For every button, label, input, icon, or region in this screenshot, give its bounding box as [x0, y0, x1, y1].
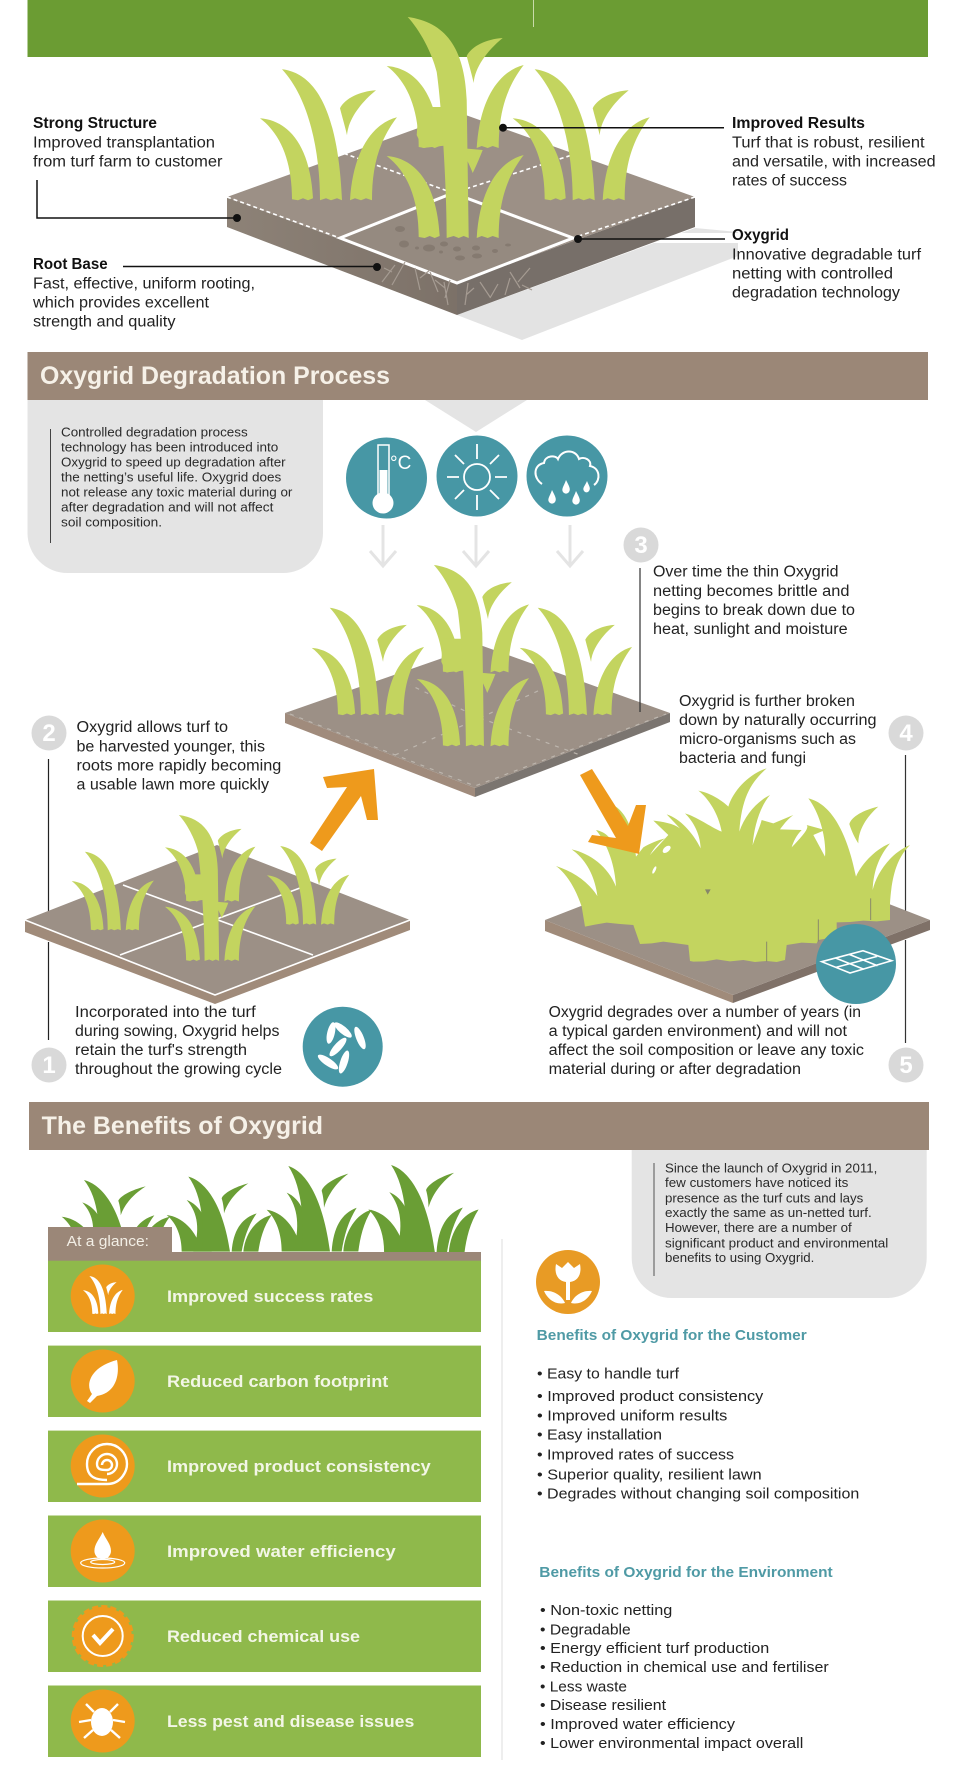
panel: launch of Oxygrid note: significant product and environmental [665, 1235, 888, 1250]
step 5: affect the soil composition or leave any toxic [549, 1042, 864, 1059]
list: benefits for the customer: • Improved product consistency [537, 1388, 764, 1405]
icon: temperature [346, 438, 427, 518]
illustration: Oxygrid turf cross-section [227, 17, 740, 340]
step 2: be harvested younger, this [76, 739, 265, 756]
row: less pest and disease issues: Less pest and disease issues [167, 1712, 414, 1731]
section heading: The Benefits of Oxygrid: The Benefits of Oxygrid [42, 1112, 323, 1140]
step 1: retain the turf's strength [75, 1042, 247, 1059]
list: benefits for the customer: • Improved uniform results [537, 1407, 727, 1424]
icon: seeds [303, 1007, 383, 1087]
step 4: down by naturally occurring [679, 712, 876, 729]
step 5: material during or after degradation [549, 1061, 801, 1078]
step 3 [624, 528, 855, 712]
callout: Strong Structure: Strong Structure [33, 115, 157, 132]
top green header band [28, 0, 928, 57]
illustration: stage 1 young turf with visible netting [25, 815, 410, 1004]
list: benefits for the customer: • Easy installation [537, 1427, 662, 1444]
panel: controlled degradation intro: soil composition. [61, 515, 162, 530]
panel: launch of Oxygrid note [632, 1150, 927, 1298]
list: benefits for the customer [537, 1327, 859, 1503]
icon: sunlight [436, 436, 518, 516]
step 4: Oxygrid is further broken [679, 693, 855, 710]
panel: launch of Oxygrid note: benefits to using Oxygrid. [665, 1250, 814, 1265]
step 3: heat, sunlight and moisture [653, 621, 848, 638]
step 2: roots more rapidly becoming [76, 758, 281, 775]
step 4: micro-organisms such as [679, 731, 856, 748]
list: benefits for the environment: • Degradable [540, 1622, 631, 1638]
step 4 [679, 693, 924, 1043]
callout: Oxygrid: degradation technology [732, 284, 900, 301]
callout: Oxygrid: Innovative degradable turf [732, 246, 922, 263]
callout: Root Base: which provides excellent [32, 295, 210, 312]
arrow: stage 2 to 3 [310, 769, 378, 851]
panel: launch of Oxygrid note: However, there are a number of [665, 1220, 852, 1235]
step 5: a typical garden environment) and will not [549, 1023, 848, 1040]
step 3: netting becomes brittle and [653, 583, 850, 600]
callout: Improved Results: rates of success [732, 173, 847, 190]
panel: launch of Oxygrid note: presence as the turf cuts and lays [665, 1190, 863, 1206]
panel: controlled degradation intro: technology has been introduced into [61, 440, 278, 455]
row: improved water efficiency [48, 1516, 481, 1587]
row: improved success rates [48, 1261, 481, 1332]
panel: launch of Oxygrid note: Since the launch of Oxygrid in 2011, [665, 1160, 877, 1175]
callout: Root Base [32, 256, 381, 330]
step 4: bacteria and fungi [679, 750, 806, 767]
step 1: 1 [42, 1052, 56, 1079]
step 1: Incorporated into the turf [75, 1004, 256, 1021]
callout: Oxygrid [574, 227, 922, 301]
panel: controlled degradation intro [28, 400, 323, 573]
step 5: 5 [899, 1052, 913, 1079]
callout: Strong Structure [33, 115, 241, 222]
panel: controlled degradation intro: not release any toxic material during or [61, 485, 293, 500]
callout: Improved Results: and versatile, with increased [732, 154, 936, 171]
panel: controlled degradation intro: Oxygrid to speed up degradation after [61, 455, 286, 470]
row: reduced chemical use [48, 1600, 481, 1672]
callout: Oxygrid: netting with controlled [732, 265, 893, 282]
panel: controlled degradation intro: after degradation and will not affect [61, 500, 274, 515]
section heading: Oxygrid Degradation Process: Oxygrid Degradation Process [40, 362, 390, 390]
row: improved product consistency: Improved product consistency [167, 1457, 431, 1476]
list: benefits for the environment: Benefits of Oxygrid for the Environment [539, 1564, 833, 1581]
callout: Improved Results: Improved Results [732, 115, 865, 132]
step 2: a usable lawn more quickly [76, 776, 269, 793]
icon: flower [536, 1250, 600, 1314]
list: benefits for the environment: • Non-toxic netting [540, 1602, 672, 1619]
step 1 [32, 1004, 282, 1082]
step 2: Oxygrid allows turf to [76, 719, 228, 736]
list: benefits for the environment: • Lower environmental impact overall [540, 1735, 803, 1752]
row: reduced carbon footprint: Reduced carbon footprint [167, 1372, 389, 1391]
illustration: dark green grass strip [62, 1165, 479, 1252]
step 1: during sowing, Oxygrid helps [75, 1023, 280, 1040]
illustration: stage 3 turf with brittle netting [285, 565, 670, 797]
panel: controlled degradation intro: Controlled degradation process [61, 425, 248, 440]
callout: Root Base: Root Base [33, 256, 108, 273]
step 5: Oxygrid degrades over a number of years (in [549, 1004, 861, 1021]
list: benefits for the environment: • Energy efficient turf production [540, 1640, 769, 1657]
step 2: 2 [42, 720, 56, 747]
at a glance tab: At a glance: [67, 1233, 149, 1250]
callout: Improved Results [499, 115, 936, 190]
step 5 [549, 1004, 924, 1082]
row: reduced chemical use: Reduced chemical use [167, 1627, 360, 1646]
list: benefits for the environment: • Reduction in chemical use and fertiliser [540, 1659, 829, 1676]
icon: netting grid [816, 924, 896, 1004]
icon: moisture [526, 436, 608, 516]
panel: controlled degradation intro: the netting’s useful life. Oxygrid does [61, 470, 281, 485]
step 2 [32, 716, 281, 1040]
list: benefits for the customer: • Superior quality, resilient lawn [537, 1466, 762, 1483]
step 3: 3 [634, 532, 648, 559]
list: benefits for the customer: Benefits of Oxygrid for the Customer [537, 1327, 807, 1344]
callout: Oxygrid: Oxygrid [732, 227, 789, 244]
callout: Root Base: strength and quality [33, 314, 176, 330]
callout: Strong Structure: Improved transplantation [33, 135, 215, 152]
panel: launch of Oxygrid note: exactly the same as un-netted turf. [665, 1205, 872, 1220]
step 3: Over time the thin Oxygrid [653, 564, 838, 581]
row: improved product consistency [48, 1431, 481, 1502]
column divider [501, 1239, 503, 1760]
pointer triangle under heading [425, 400, 527, 432]
step 3: begins to break down due to [653, 602, 855, 619]
illustration: stage 5 mature lawn [545, 768, 930, 1003]
callout: Root Base: Fast, effective, uniform rooting, [33, 276, 255, 292]
callout: Strong Structure: from turf farm to customer [33, 154, 222, 171]
row: improved water efficiency: Improved water efficiency [167, 1542, 396, 1561]
row: improved success rates: Improved success rates [167, 1287, 373, 1306]
list: benefits for the customer: • Easy to handle turf [537, 1365, 680, 1382]
list: benefits for the customer: • Improved rates of success [537, 1446, 734, 1464]
list: benefits for the environment: • Improved water efficiency [540, 1716, 736, 1733]
step 4: 4 [899, 720, 913, 747]
list: benefits for the environment: • Less waste [540, 1678, 627, 1695]
callout: Improved Results: Turf that is robust, resilient [732, 135, 925, 152]
list: benefits for the environment: • Disease resilient [540, 1697, 667, 1714]
arrows: elements acting on the turf [370, 525, 583, 566]
section heading: Oxygrid Degradation Process [28, 352, 928, 400]
icon: temperature: °C [390, 453, 411, 474]
at a glance tab [48, 1227, 481, 1261]
arrow: stage 3 to 5 [580, 769, 646, 854]
list: benefits for the customer: • Degrades without changing soil composition [537, 1486, 859, 1503]
section heading: The Benefits of Oxygrid [29, 1102, 929, 1150]
panel: launch of Oxygrid note: few customers have noticed its [665, 1175, 848, 1190]
row: reduced carbon footprint [48, 1346, 481, 1417]
step 1: throughout the growing cycle [75, 1061, 282, 1078]
list: benefits for the environment [539, 1564, 833, 1752]
row: less pest and disease issues [48, 1686, 481, 1757]
